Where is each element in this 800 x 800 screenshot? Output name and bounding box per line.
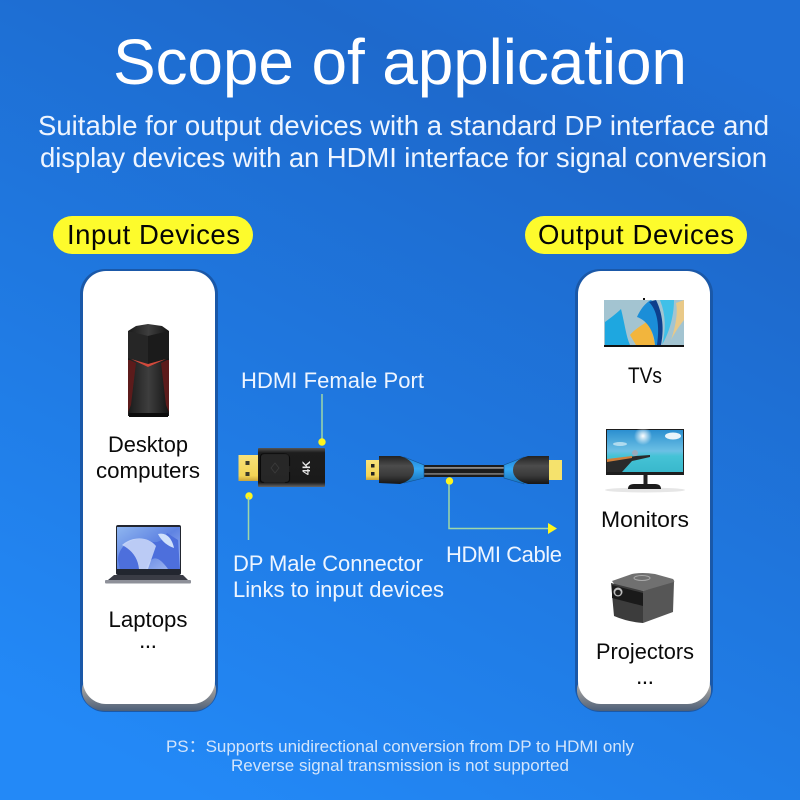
label: dp male connector: DP Male Connector [233,551,423,576]
footnote: PS：Supports unidirectional conversion from DP to HDMI only [166,737,634,756]
icon: desktop tower [128,324,169,417]
arrow: dp connector pointer [245,492,253,540]
label: monitors: Monitors [601,507,689,532]
badge: input devices: Input Devices [67,219,240,250]
label: desktop computers: Desktop [108,432,188,457]
label: hdmi female port: HDMI Female Port [241,368,424,393]
label: desktop computers: computers [96,458,200,483]
panel: output devices [575,269,713,712]
label: dp male connector [233,551,444,602]
label: projectors [596,639,694,689]
label: hdmi cable: HDMI Cable [446,542,562,567]
adapter: dp to hdmi: 4K [301,461,313,475]
label: laptops: ... [139,627,157,653]
arrow: hdmi cable pointer [446,477,557,534]
icon: tv [604,298,684,347]
title: Scope of application [113,26,687,98]
icon: monitor [605,427,685,492]
subtitle: Suitable for output devices with a standard DP interface and [38,110,769,141]
label: laptops [108,607,188,653]
panel: input devices [80,269,218,712]
label: tvs: TVs [628,363,662,388]
label: dp male connector: Links to input devices [233,577,444,602]
hdmi cable [366,456,562,484]
subtitle: display devices with an HDMI interface for signal conversion [40,142,767,173]
icon: laptop [105,525,191,584]
footnote [166,737,634,775]
subtitle [38,110,769,173]
arrow: hdmi female port pointer [318,394,326,446]
adapter: dp to hdmi [238,448,325,487]
label: desktop computers [96,432,200,483]
footnote: Reverse signal transmission is not supported [231,756,569,775]
label: projectors: ... [636,663,654,689]
badge: output devices: Output Devices [538,219,734,250]
label: projectors: Projectors [596,639,694,664]
icon: projector [611,573,674,623]
label: laptops: Laptops [108,607,188,632]
